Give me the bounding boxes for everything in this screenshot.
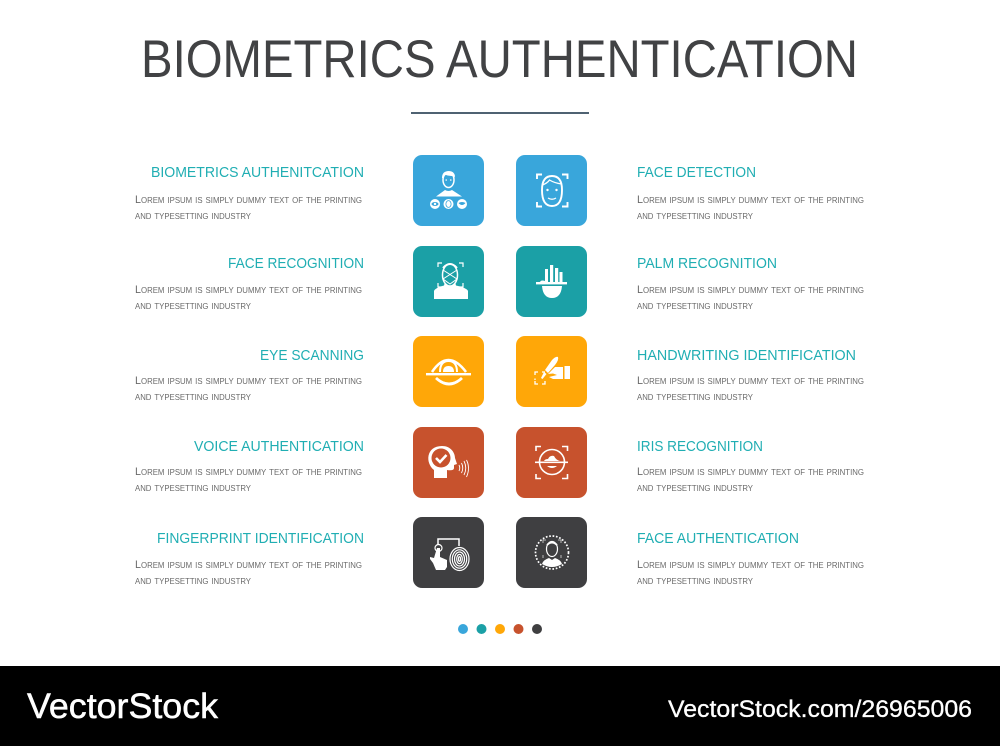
left item 2 text bbox=[135, 255, 364, 312]
right item 3 text: and typesetting industry bbox=[637, 391, 754, 403]
left item 5 text: FINGERPRINT IDENTIFICATION bbox=[157, 530, 364, 547]
right item 1 text: and typesetting industry bbox=[637, 210, 754, 222]
icon: face detection bbox=[516, 155, 587, 226]
right item 2 text bbox=[637, 255, 864, 312]
left item 5 text: and typesetting industry bbox=[135, 575, 252, 587]
left item 1 text: Lorem ipsum is simply dummy text of the printing bbox=[135, 194, 362, 206]
left item 3 text bbox=[135, 347, 364, 403]
right item 5 text: FACE AUTHENTICATION bbox=[637, 530, 799, 547]
left item 1 text: and typesetting industry bbox=[135, 210, 252, 222]
footer bar bbox=[0, 666, 1000, 746]
left item 4 text: and typesetting industry bbox=[135, 482, 252, 494]
icon: face authentication bbox=[516, 517, 587, 588]
icon: face recognition bbox=[413, 246, 484, 317]
right item 1 text: FACE DETECTION bbox=[637, 164, 756, 181]
pagination dots bbox=[458, 624, 542, 634]
right item 4 text: and typesetting industry bbox=[637, 482, 754, 494]
icon: iris recognition bbox=[516, 427, 587, 498]
left item 2 text: FACE RECOGNITION bbox=[228, 255, 364, 272]
right item 2 text: Lorem ipsum is simply dummy text of the printing bbox=[637, 284, 864, 296]
left item 5 text bbox=[135, 530, 364, 587]
icon: eye scanning bbox=[413, 336, 484, 407]
left item 3 text: EYE SCANNING bbox=[260, 347, 364, 364]
left item 2 text: and typesetting industry bbox=[135, 300, 252, 312]
icon: biometrics person bbox=[413, 155, 484, 226]
right item 3 text: Lorem ipsum is simply dummy text of the printing bbox=[637, 375, 864, 387]
right item 5 text: and typesetting industry bbox=[637, 575, 754, 587]
right item 3 text bbox=[637, 347, 864, 403]
left item 4 text bbox=[135, 438, 364, 494]
left item 2 text: Lorem ipsum is simply dummy text of the printing bbox=[135, 284, 362, 296]
right item 1 text: Lorem ipsum is simply dummy text of the printing bbox=[637, 194, 864, 206]
right item 4 text bbox=[637, 438, 864, 494]
left item 3 text: Lorem ipsum is simply dummy text of the printing bbox=[135, 375, 362, 387]
right item 1 text bbox=[637, 164, 864, 222]
right item 4 text: IRIS RECOGNITION bbox=[637, 438, 763, 455]
left item 1 text: BIOMETRICS AUTHENITCATION bbox=[151, 164, 364, 181]
footer logo: VectorStock bbox=[27, 687, 219, 726]
right item 4 text: Lorem ipsum is simply dummy text of the printing bbox=[637, 466, 864, 478]
right item 5 text bbox=[637, 530, 864, 587]
icon: voice authentication bbox=[413, 427, 484, 498]
icon: handwriting bbox=[516, 336, 587, 407]
right item 2 text: PALM RECOGNITION bbox=[637, 255, 777, 272]
left item 3 text: and typesetting industry bbox=[135, 391, 252, 403]
icon: palm recognition bbox=[516, 246, 587, 317]
left item 4 text: Lorem ipsum is simply dummy text of the printing bbox=[135, 466, 362, 478]
right item 3 text: HANDWRITING IDENTIFICATION bbox=[637, 347, 856, 364]
left item 1 text bbox=[135, 164, 364, 222]
left item 5 text: Lorem ipsum is simply dummy text of the printing bbox=[135, 559, 362, 571]
footer url: VectorStock.com/26965006 bbox=[668, 696, 972, 723]
right item 5 text: Lorem ipsum is simply dummy text of the printing bbox=[637, 559, 864, 571]
right item 2 text: and typesetting industry bbox=[637, 300, 754, 312]
left item 4 text: VOICE AUTHENTICATION bbox=[194, 438, 364, 455]
icon: fingerprint bbox=[413, 517, 484, 588]
title: BIOMETRICS AUTHENTICATION bbox=[141, 30, 858, 89]
